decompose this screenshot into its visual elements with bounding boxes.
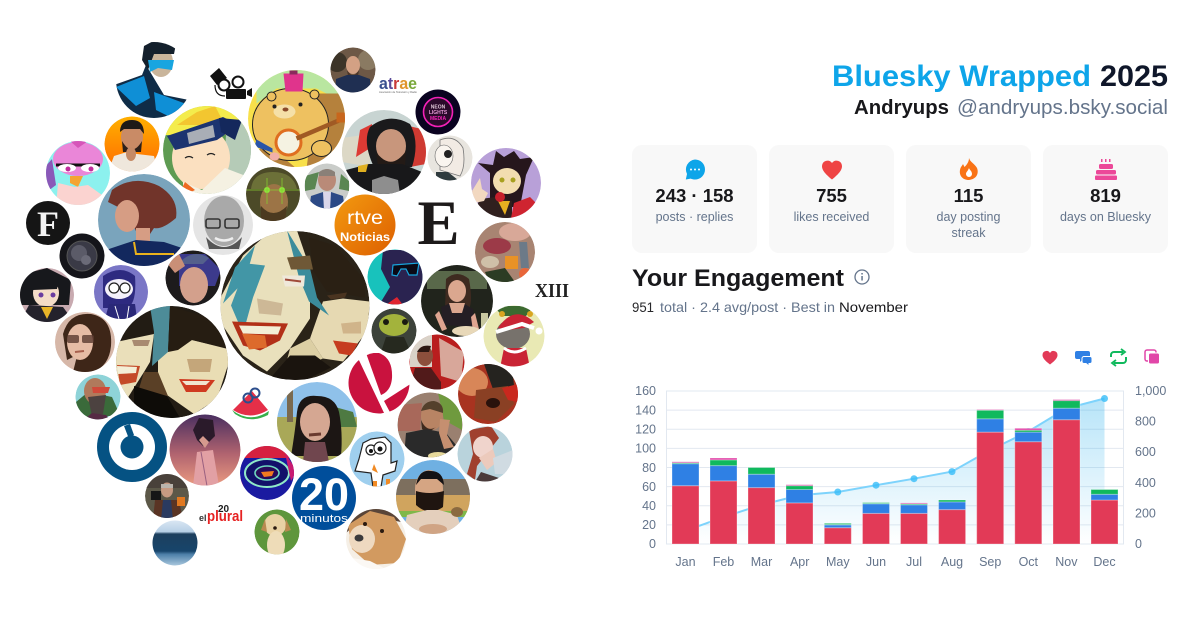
avatar: psychedelic pattern <box>239 446 297 500</box>
avatar: food platter <box>475 222 535 282</box>
stat card: posting streak <box>906 145 1031 253</box>
engagement summary line <box>632 299 908 315</box>
avatar: second large face <box>116 306 228 418</box>
left axis labels: 60 <box>642 480 656 494</box>
logo: rtve Noticias: Noticias <box>340 232 390 244</box>
month labels: Feb <box>713 555 734 569</box>
right axis labels: 600 <box>1135 445 1156 459</box>
right axis labels: 800 <box>1135 414 1156 428</box>
month labels: Jun <box>866 555 886 569</box>
logo: elplural: 20 <box>218 504 230 515</box>
title: Bluesky Wrapped 2025: 2025 <box>1100 60 1168 93</box>
stacked bars <box>672 400 1118 544</box>
avatar: naruto <box>163 106 251 194</box>
avatar: red jacket anime girl <box>471 148 541 218</box>
avatar: woman with blue hair <box>166 250 221 306</box>
logo: XIII: XIII <box>535 280 569 302</box>
left axis labels: 160 <box>635 384 656 398</box>
profile name and handle: @andryups.bsky.social <box>957 97 1168 119</box>
avatar: man in black t-shirt <box>398 392 462 460</box>
avatar: bearded man on orange <box>104 116 160 172</box>
cumulative area line <box>686 395 1108 544</box>
legend: quotes <box>1145 350 1160 364</box>
avatar: dark upside-down face <box>456 364 518 424</box>
icon: speech bubble <box>686 160 705 180</box>
stat card: days on Bluesky: days on Bluesky <box>1060 210 1152 224</box>
avatar: man with hood <box>342 110 426 194</box>
logo: 20 minutos: 20 <box>299 469 349 520</box>
logo: elplural: plural <box>207 508 243 525</box>
right axis labels: 200 <box>1135 506 1156 520</box>
avatar bubble cluster <box>20 38 569 569</box>
left axis labels: 0 <box>649 537 656 551</box>
legend: likes heart <box>1042 351 1058 364</box>
logo: F <box>26 201 70 245</box>
bar: Sep <box>977 409 1004 544</box>
legend: reposts <box>1111 349 1126 366</box>
avatar: neon media logo: NEON <box>431 104 446 110</box>
avatar: neon media logo: LIGHTS <box>429 110 448 116</box>
logo: atrae: atrae <box>379 74 417 93</box>
stat card: likes: likes received <box>794 210 869 224</box>
logo: 20 minutos: minutos <box>300 513 349 525</box>
stat card: days on Bluesky <box>1043 145 1168 253</box>
stat card: posting streak: 115 <box>954 185 983 206</box>
month labels: Apr <box>790 555 809 569</box>
avatar: golden puppy <box>254 510 300 559</box>
avatar: dark sphere <box>60 234 104 278</box>
avatar: masked hero <box>116 42 186 118</box>
avatar: neon media logo <box>416 90 460 134</box>
profile name and handle: Andryups <box>854 97 949 119</box>
stat card: posts and replies <box>632 145 757 253</box>
avatar: purple cartoon with glasses <box>94 265 148 319</box>
icon: birthday cake <box>1095 159 1117 180</box>
bar: Aug <box>939 500 966 544</box>
logo: rtve Noticias <box>334 194 396 256</box>
avatar: man in blue suit <box>304 164 350 210</box>
avatar: woman at table <box>421 265 493 337</box>
stat card: posts and replies: 243 · 158 <box>655 185 734 206</box>
right axis labels <box>1135 384 1166 551</box>
logo: blue ring <box>97 412 167 482</box>
avatar: green frog <box>372 308 416 355</box>
icon: watermelon with glasses <box>232 388 269 419</box>
chart legend icons <box>1042 349 1160 366</box>
icon: film camera <box>210 68 252 99</box>
avatar: santa hat animal <box>484 306 544 368</box>
avatar: eyepatch sketch <box>428 136 472 182</box>
bar: Jan <box>672 462 699 544</box>
bar: Nov <box>1053 400 1080 544</box>
avatar: bearded man with fence <box>396 460 470 534</box>
bar: Mar <box>748 468 775 544</box>
avatar: anime profile at dusk <box>170 414 240 486</box>
logo: E: E <box>417 188 460 258</box>
avatar: hamster with banjo <box>248 68 346 168</box>
logo: elplural <box>199 504 243 525</box>
bar: Jun <box>862 502 890 544</box>
stat card: likes: 755 <box>816 185 847 206</box>
engagement summary line: November <box>839 299 908 315</box>
logo: rtve Noticias: rtve <box>347 208 383 229</box>
left axis labels: 140 <box>635 404 656 418</box>
icon: flame <box>960 158 978 180</box>
month labels: Oct <box>1019 555 1039 569</box>
logo: atrae: Asociación de Televisión y Radio <box>379 90 417 94</box>
month labels: Dec <box>1093 555 1116 569</box>
logo: F: F <box>37 204 59 244</box>
avatar: furby <box>44 141 110 207</box>
avatar: red haired anime sketch <box>458 426 513 482</box>
bar: Jul <box>900 503 928 544</box>
icon: heart <box>822 161 842 180</box>
engagement summary line: total · 2.4 avg/post · Best in <box>660 299 835 315</box>
avatar: golden dog <box>346 509 406 569</box>
logo: 20 minutos <box>292 466 356 530</box>
avatar: darth vader with sunglasses <box>368 250 423 305</box>
avatar: man in dark shirt <box>330 48 376 92</box>
left axis labels: 80 <box>642 461 656 475</box>
right axis labels: 1,000 <box>1135 384 1166 398</box>
bar: Dec <box>1091 490 1118 544</box>
logo: P <box>348 353 410 414</box>
heading: Your Engagement: Your Engagement <box>632 265 844 292</box>
bar: May <box>824 523 851 544</box>
month labels: Aug <box>941 555 963 569</box>
profile name and handle <box>854 97 1168 119</box>
avatar: woman with curly hair and glasses <box>55 312 115 372</box>
avatar: man with books <box>145 474 189 520</box>
bar: Oct <box>1015 428 1042 544</box>
avatar: neon media logo: MEDIA <box>430 116 446 122</box>
engagement summary line: 951 <box>632 299 654 315</box>
month labels: Nov <box>1055 555 1078 569</box>
stat card: likes <box>769 145 894 253</box>
avatar: man in red room <box>409 334 464 390</box>
left axis labels: 100 <box>635 442 656 456</box>
stat card: posting streak: day posting <box>937 210 1001 224</box>
icon: info <box>855 270 869 284</box>
logo: elplural: el <box>199 513 207 523</box>
avatar: mountain lake <box>152 520 198 566</box>
avatar: man with long hair <box>277 382 357 462</box>
month labels: Jan <box>675 555 696 569</box>
month labels <box>675 555 1116 569</box>
month labels: Mar <box>751 555 772 569</box>
chart: monthly engagement <box>635 384 1166 569</box>
left axis labels: 120 <box>635 422 656 436</box>
right axis labels: 0 <box>1135 537 1142 551</box>
bar: Feb <box>710 458 737 544</box>
legend: replies <box>1075 351 1092 366</box>
month labels: Jul <box>906 555 922 569</box>
left axis labels: 20 <box>642 518 656 532</box>
stat card: days on Bluesky: 819 <box>1090 185 1121 206</box>
right axis labels: 400 <box>1135 476 1156 490</box>
avatar: bald bearded man <box>76 374 120 421</box>
title: Bluesky Wrapped 2025: Bluesky Wrapped <box>832 60 1091 93</box>
stat card: posting streak: streak <box>951 226 986 240</box>
left axis labels <box>635 384 656 551</box>
month labels: May <box>826 555 850 569</box>
stat card: posts and replies: posts · replies <box>656 210 733 224</box>
avatar: anime boy with black hair <box>20 268 74 322</box>
avatar: bald man with glasses <box>193 195 253 255</box>
avatar: woman in Boca shirt <box>98 174 190 266</box>
bar: Apr <box>786 485 813 544</box>
avatar: soldier with green eyes <box>246 167 300 222</box>
avatar: white cartoon dog <box>350 432 404 487</box>
month labels: Sep <box>979 555 1001 569</box>
left axis labels: 40 <box>642 499 656 513</box>
avatar: big teal-haired face <box>220 230 370 380</box>
gridlines <box>666 391 1124 544</box>
